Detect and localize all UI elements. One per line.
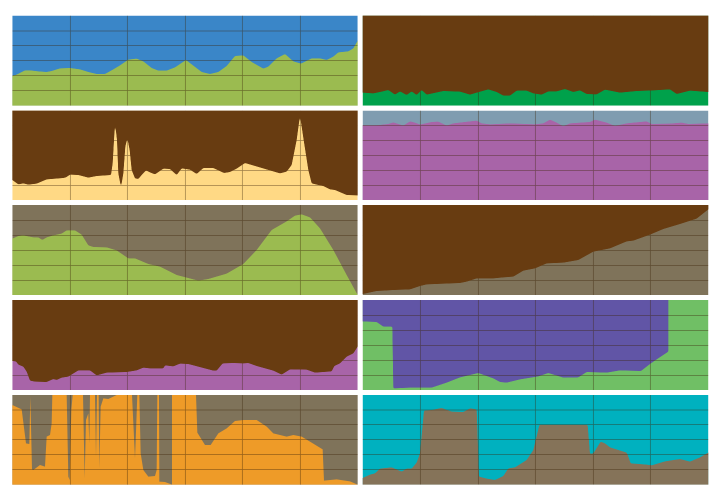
panel: blue over green area chart <box>12 16 358 106</box>
panel: teal over taupe plateau area chart <box>362 395 708 485</box>
panel: taupe over orange jagged area chart <box>12 395 358 485</box>
panel: brown over dark green area chart <box>362 16 708 106</box>
panel: indigo over light green area chart <box>355 293 708 390</box>
panel: brown over yellow area chart with sharp peaks <box>12 110 358 200</box>
panel: taupe over green hump area chart <box>12 205 358 295</box>
panel: brown over taupe rising area chart <box>362 205 708 295</box>
panel: brown over purple area chart <box>12 300 358 390</box>
panel: grey-blue over purple area chart <box>362 110 708 200</box>
